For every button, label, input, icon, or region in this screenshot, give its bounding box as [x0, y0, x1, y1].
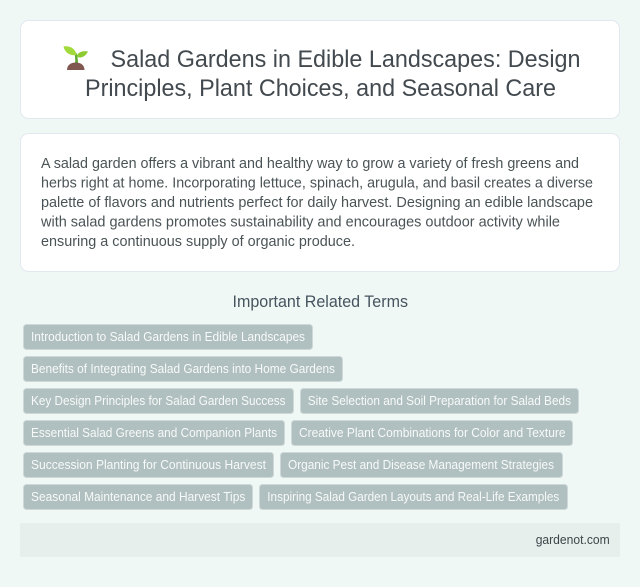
tag: essential greens	[24, 420, 284, 446]
tag: benefits: Benefits of Integrating Salad Gardens into Home Gardens	[31, 361, 335, 376]
panel: introduction text	[20, 134, 620, 272]
footer	[20, 523, 620, 557]
footer source text: gardenot.com	[536, 532, 610, 547]
panel: related term tags	[24, 324, 578, 510]
tag: seasonal maintenance: Seasonal Maintenance and Harvest Tips	[31, 489, 245, 504]
heading: important related terms: Important Related Terms	[232, 293, 408, 311]
tag: plant combinations: Creative Plant Combinations for Color and Texture	[299, 425, 566, 440]
tag: site selection	[300, 388, 578, 414]
text block: introduction paragraph	[40, 156, 593, 250]
tag: garden layouts	[260, 484, 568, 510]
tag: pest management: Organic Pest and Disease Management Strategies	[288, 457, 554, 472]
tag: benefits	[24, 356, 342, 382]
title: Principles, Plant Choices, and Seasonal Care	[85, 75, 556, 102]
text block: introduction paragraph: palette of flavors and nutrients perfect for daily harvest. Designing an edible landscape	[41, 195, 593, 211]
text block: introduction paragraph: ensuring a continuous supply of organic produce.	[41, 234, 355, 250]
icon: seedling	[64, 46, 88, 70]
tag: seasonal maintenance	[24, 484, 252, 510]
tag: introduction	[24, 324, 312, 350]
tag: pest management	[280, 452, 562, 478]
tag: design principles	[24, 388, 294, 414]
text block: introduction paragraph: with salad gardens promotes sustainability and encourages outdoor activity while	[40, 214, 560, 230]
tag: garden layouts: Inspiring Salad Garden Layouts and Real-Life Examples	[267, 489, 559, 504]
title: Salad Gardens in Edible Landscapes: Design	[110, 46, 580, 73]
panel: title card	[20, 20, 620, 118]
tag: design principles: Key Design Principles for Salad Garden Success	[31, 393, 286, 408]
title	[85, 46, 580, 102]
text block: introduction paragraph: herbs right at home. Incorporating lettuce, spinach, arugula, and basil creates a diverse	[41, 176, 593, 192]
tag: essential greens: Essential Salad Greens and Companion Plants	[31, 425, 277, 440]
tag: plant combinations	[292, 420, 572, 446]
tag: introduction: Introduction to Salad Gardens in Edible Landscapes	[31, 329, 305, 344]
tag: succession planting: Succession Planting for Continuous Harvest	[31, 457, 266, 472]
tag: succession planting	[24, 452, 274, 478]
text block: introduction paragraph: A salad garden offers a vibrant and healthy way to grow a variety of fresh greens and	[41, 156, 579, 172]
tag: site selection: Site Selection and Soil Preparation for Salad Beds	[308, 393, 571, 408]
